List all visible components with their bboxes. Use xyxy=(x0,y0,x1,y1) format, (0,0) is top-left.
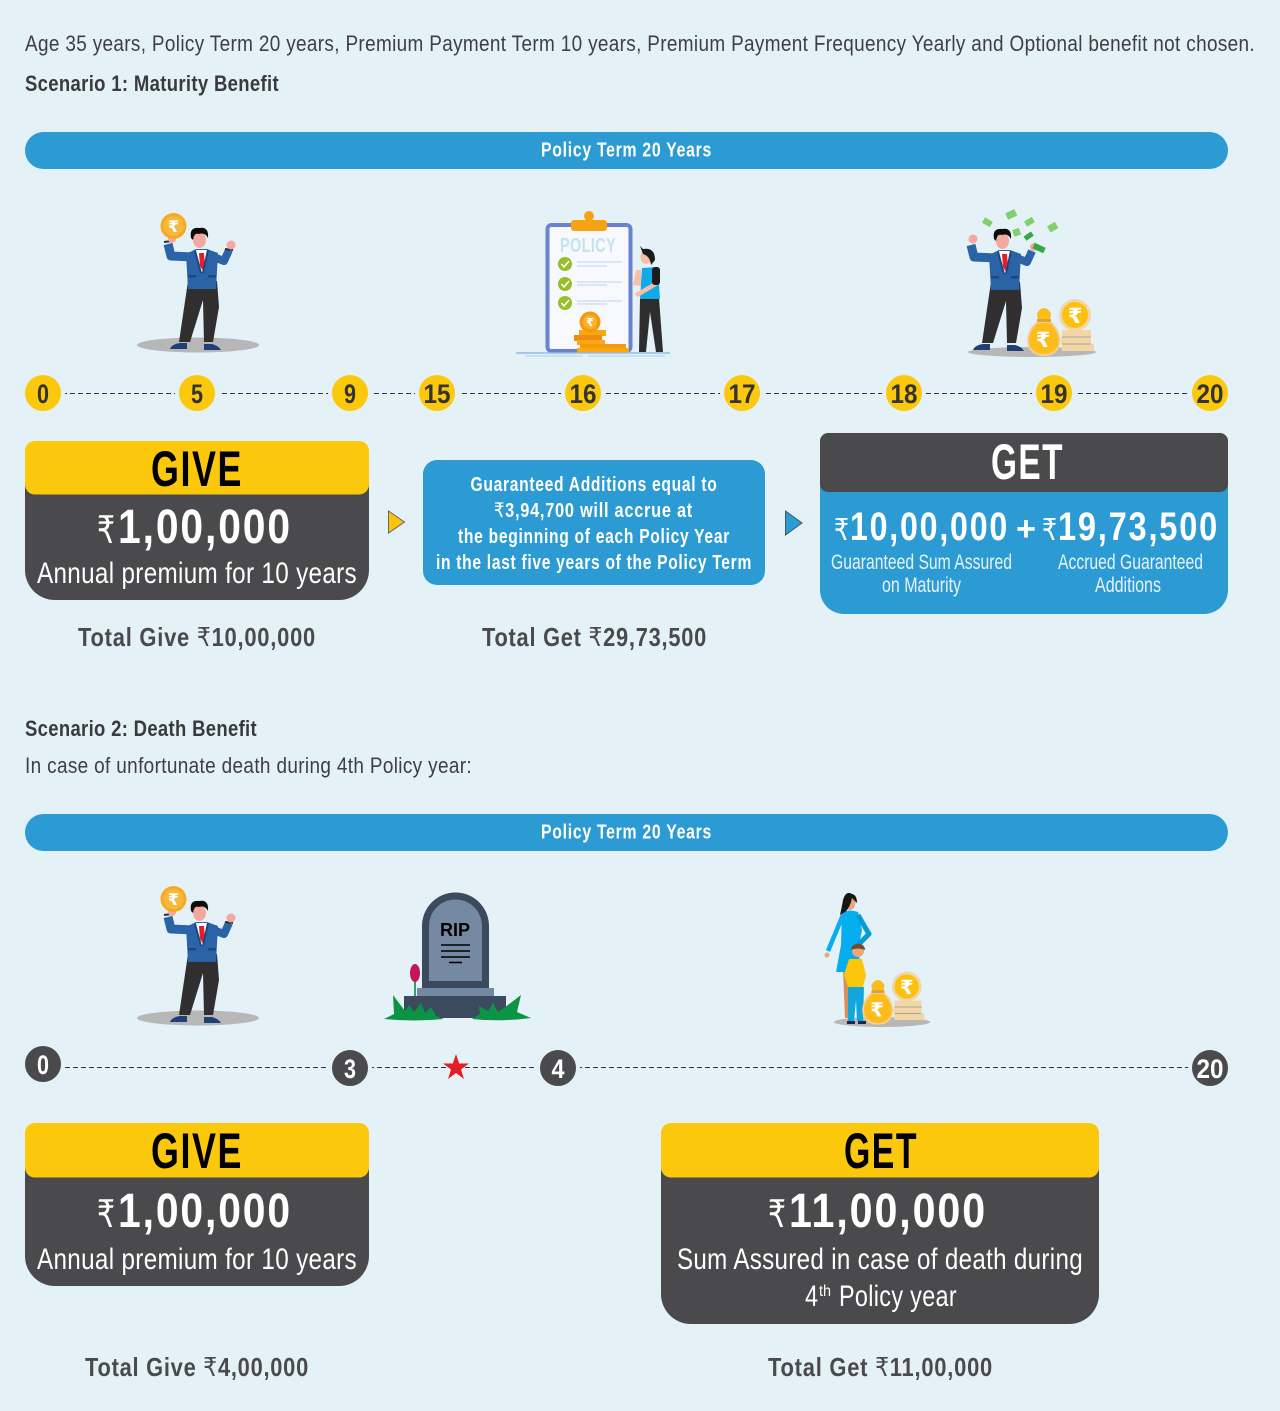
timeline 1 xyxy=(23,373,1230,413)
total give scenario 2: Total Give ₹4,00,000 xyxy=(85,1352,309,1382)
scenario 2 description: In case of unfortunate death during 4th Policy year: xyxy=(25,753,472,778)
heading: scenario 1: Scenario 1: Maturity Benefit xyxy=(25,71,279,96)
icon: man holding coin xyxy=(137,886,259,1026)
panel: give scenario 2 xyxy=(25,1123,369,1286)
panel: give scenario 2: GIVE xyxy=(151,1123,243,1179)
policy term bar 2 xyxy=(25,814,1228,851)
panel: give scenario 2: ₹ xyxy=(97,1194,115,1236)
panel: give scenario 1: 1,00,000 xyxy=(118,501,292,554)
panel: guaranteed additions: Guaranteed Additions equal to xyxy=(470,474,718,496)
timeline 2 xyxy=(23,1044,1230,1088)
timeline 1: 17 xyxy=(728,379,756,409)
icon: man with money bag and coins: ₹ xyxy=(1036,329,1050,352)
panel: get scenario 1: 10,00,000 xyxy=(850,505,1009,549)
icon: man with money bag and coins xyxy=(968,209,1096,357)
panel: get scenario 2 xyxy=(661,1123,1099,1324)
total give scenario 1: Total Give ₹10,00,000 xyxy=(78,622,316,652)
panel: get scenario 2: th xyxy=(819,1283,831,1300)
policy term bar 1: Policy Term 20 Years xyxy=(541,140,712,162)
icon: man holding coin xyxy=(137,213,259,352)
timeline 1: 15 xyxy=(424,379,450,409)
panel: get scenario 1: ₹ xyxy=(834,514,849,547)
panel: give scenario 2: Annual premium for 10 years xyxy=(37,1243,357,1276)
timeline 1: 5 xyxy=(191,379,203,409)
icon: mother, child and money xyxy=(824,893,930,1027)
icon: mother, child and money: ₹ xyxy=(870,999,884,1021)
panel: guaranteed additions: in the last five years of the Policy Term xyxy=(436,552,752,574)
panel: get scenario 2: Policy year xyxy=(839,1280,957,1313)
panel: get scenario 2: 4 xyxy=(805,1280,818,1313)
timeline 2: 0 xyxy=(37,1050,49,1080)
panel: get scenario 2: ₹ xyxy=(768,1194,786,1236)
icon: tombstone: RIP xyxy=(440,920,470,940)
total get scenario 1: Total Get ₹29,73,500 xyxy=(482,622,707,652)
arrow: yellow xyxy=(388,511,404,533)
timeline 1: 9 xyxy=(344,379,356,409)
policy term bar 1 xyxy=(25,132,1228,169)
panel: get scenario 1: 19,73,500 xyxy=(1058,505,1219,549)
panel: guaranteed additions: ₹3,94,700 will accrue at xyxy=(494,500,693,522)
panel: get scenario 1: ₹ xyxy=(1042,514,1057,547)
panel: get scenario 2: Sum Assured in case of death during xyxy=(677,1243,1083,1276)
panel: get scenario 2: GET xyxy=(844,1123,918,1179)
timeline 1: 19 xyxy=(1040,379,1068,409)
total get scenario 2: Total Get ₹11,00,000 xyxy=(768,1352,993,1382)
panel: guaranteed additions: the beginning of each Policy Year xyxy=(458,526,730,548)
icon: mother, child and money: ₹ xyxy=(900,977,914,999)
icon: policy clipboard with person: POLICY xyxy=(560,235,616,257)
heading: scenario 2: Scenario 2: Death Benefit xyxy=(25,716,257,741)
timeline 1: 20 xyxy=(1196,379,1224,409)
panel: get scenario 1 xyxy=(820,433,1228,614)
arrow: blue xyxy=(786,511,802,535)
panel: get scenario 1: on Maturity xyxy=(882,574,961,597)
panel: get scenario 1: GET xyxy=(991,434,1064,490)
panel: give scenario 2: 1,00,000 xyxy=(118,1185,292,1238)
panel: give scenario 1 xyxy=(25,441,369,600)
timeline 2: 20 xyxy=(1196,1054,1224,1084)
policy term bar 2: Policy Term 20 Years xyxy=(541,822,712,844)
timeline 1: 18 xyxy=(890,379,918,409)
timeline 1: 0 xyxy=(37,379,49,409)
icon: man holding coin: ₹ xyxy=(168,219,179,236)
timeline 1: 16 xyxy=(570,379,596,409)
panel: get scenario 1: Accrued Guaranteed xyxy=(1058,551,1203,574)
icon: policy clipboard with person xyxy=(516,211,670,356)
panel: give scenario 1: ₹ xyxy=(97,510,115,552)
panel: give scenario 1: GIVE xyxy=(151,441,243,497)
panel: give scenario 1: Annual premium for 10 years xyxy=(37,557,357,590)
timeline 2: 4 xyxy=(552,1054,564,1084)
panel: guaranteed additions xyxy=(423,460,765,585)
timeline 2: 3 xyxy=(344,1054,356,1084)
panel: get scenario 1: Additions xyxy=(1095,574,1161,597)
icon: tombstone xyxy=(384,892,531,1020)
icon: policy clipboard with person: ₹ xyxy=(586,317,594,329)
icon: man holding coin: ₹ xyxy=(168,892,179,909)
panel: get scenario 2: 11,00,000 xyxy=(789,1185,987,1238)
panel: get scenario 1: Guaranteed Sum Assured xyxy=(831,551,1012,574)
icon: man with money bag and coins: ₹ xyxy=(1068,305,1082,328)
panel: get scenario 1: + xyxy=(1016,510,1036,548)
